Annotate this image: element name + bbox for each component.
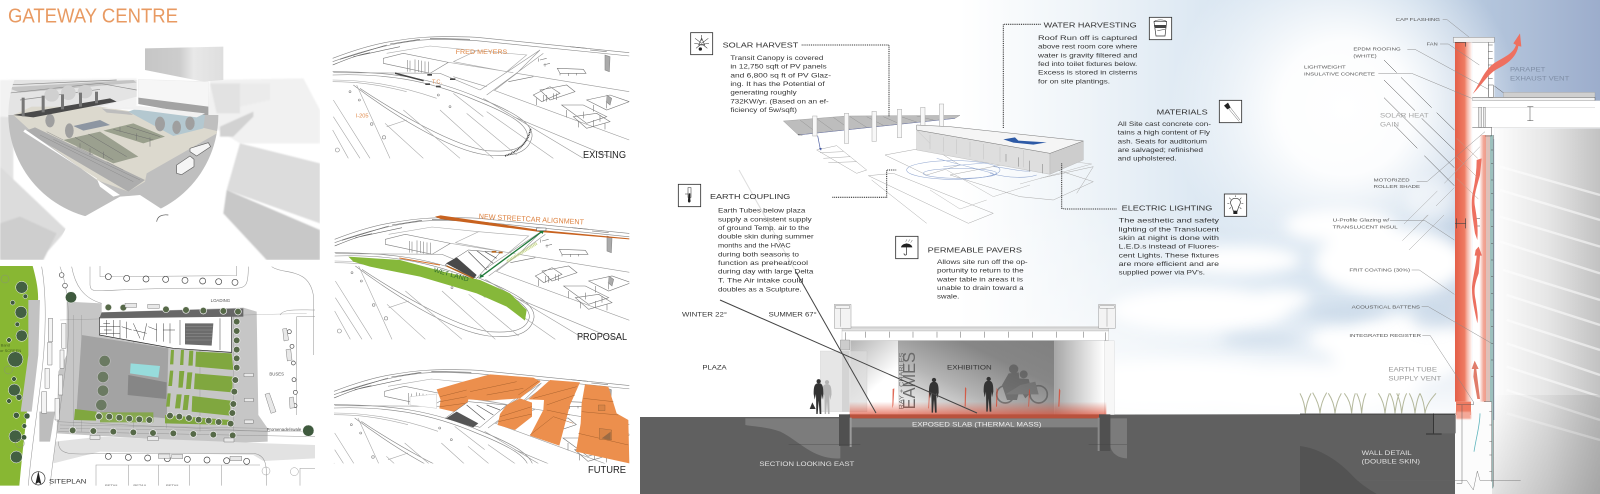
transit vehicles [42,318,66,420]
section looking east: RAY + CHARLES [900,353,906,409]
ground lines [1434,415,1456,433]
people silhouettes [822,380,832,414]
detail labels: FAN [1427,42,1438,48]
section labels: EXPOSED SLAB (THERMAL MASS) [912,422,1041,429]
clouds [1050,180,1470,415]
blurred surrounding massing [0,78,320,260]
heat plumes [892,387,1060,408]
site plan [0,266,315,488]
icon: light bulb [1224,194,1247,216]
callout: electric lighting: L.E.D.s instead of Fluores- [1119,245,1219,251]
caption: existing: EXISTING [583,149,626,161]
callout: electric lighting: ELECTRIC LIGHTING [1122,205,1213,213]
lower detail labels: INTEGRATED REGISTER [1349,333,1421,339]
electric dotted leader [1062,163,1117,209]
icon: trowel [1219,100,1242,123]
site plan: RETAIL [166,483,180,488]
greenway arrow [480,230,544,277]
lower detail labels: (DOUBLE SKIN) [1362,459,1420,466]
canopy [783,115,960,135]
site plan: RETAIL [133,483,148,488]
callout: electric lighting: supplied power via PV's. [1119,271,1205,277]
icon: thermometer [678,184,701,207]
lower detail labels: ACOUSTICAL BATTENS [1352,304,1421,310]
callout: water harvesting [1037,17,1172,85]
facade [917,130,1050,174]
cavity backing [1472,42,1494,139]
transit centre stops [395,72,455,87]
section labels: SECTION LOOKING EAST [759,461,855,468]
detail labels: (WHITE) [1353,53,1377,59]
callout: earth coupling: of ground Temp. air to the [718,226,810,232]
earth tube supply stream [1474,413,1480,452]
map: proposal: NEW STREETCAR ALIGNMENT [479,212,585,227]
map: existing [333,37,629,158]
callout: electric lighting: are more efficient and are [1119,262,1220,268]
detail labels: CAP FLASHING [1396,17,1440,23]
callout: electric lighting: skin at night is done with [1119,236,1219,242]
callout: electric lighting [1119,194,1247,277]
callout: water harvesting: water is gravity filtered and [1037,53,1137,59]
siteplan label: SITEPLAN [49,478,87,485]
Eames exhibit text: EAMES [899,352,919,409]
callout: solar harvest: in 12,750 sqft of PV panels [730,65,827,71]
section labels [682,311,1041,468]
cavity airflow arrows [1472,158,1482,240]
roof [917,125,1083,153]
detail labels: U-Profile Glazing w/ [1333,218,1390,224]
callout: water harvesting: fed into toilet fixtures below. [1038,62,1138,68]
light streaks [1500,167,1600,440]
ground disc [8,80,218,216]
plaza surface [13,107,220,192]
north arrow [32,471,45,485]
3D building diagram [783,45,1093,223]
callout: solar harvest: Transit Canopy is covered [730,56,823,62]
detail labels [1304,17,1569,230]
detail labels: LIGHTWEIGHT [1304,65,1346,71]
icon: solar [691,33,713,55]
callout: solar harvest: generating roughly [730,91,797,97]
callout: electric lighting: cent Lights. These fixtures [1119,253,1219,259]
trees [45,114,195,138]
site paving [57,302,268,443]
callout: earth coupling: EARTH COUPLING [710,193,791,201]
callout: materials: ash. Seats for auditorium [1118,139,1207,145]
sky background [960,0,1600,420]
inner cavity [1472,128,1481,494]
caption: future: FUTURE [588,464,626,476]
map: proposal [335,212,631,339]
callout: water harvesting: for on site plantings. [1038,79,1110,85]
lower detail labels: WALL DETAIL [1362,450,1412,457]
plaza slab [77,335,168,418]
callout: earth coupling: doubles as a Sculpture. [718,287,802,293]
lower detail labels: SUPPLY VENT [1388,375,1441,382]
section labels: WINTER 22° [682,311,728,318]
leader lines [1412,270,1492,402]
upper airflow arrow [1472,247,1482,323]
icon: umbrella [896,236,918,259]
trees [69,304,241,439]
callout: permeable pavers: swale. [937,295,960,301]
wetland [348,257,527,321]
detail labels: SOLAR HEAT [1380,113,1429,120]
callout: earth coupling: double skin during summer [718,235,814,241]
ground [640,414,1456,494]
detail labels: MOTORIZED [1374,177,1410,183]
detail labels: EXHAUST VENT [1510,76,1569,83]
station canopy [445,250,500,278]
site plan: BUSES [269,371,284,376]
map: future [334,369,630,464]
hall building [917,24,1117,209]
footings [839,414,1110,451]
callout: water harvesting: Roof Run off is captured [1038,36,1137,42]
station in future [445,402,507,427]
earth tube and sub-slab bands [745,418,840,458]
parapet and cavity [1453,37,1494,42]
detail labels: GAIN [1380,121,1399,128]
callout: materials: tains a high content of Fly [1118,131,1210,137]
section labels: EXHIBITION [947,364,992,371]
callout: materials: All Site cast concrete con- [1118,122,1211,128]
road lines [28,266,315,486]
earth bulge [1300,446,1377,494]
future development blocks [410,374,629,463]
map: existing: I-205 [356,114,369,120]
callout: water harvesting: above rest room core where [1038,45,1138,51]
callout: solar harvest: ing. It has the Potential of [730,82,825,88]
callout: electric lighting: lighting of the Translucent [1119,227,1219,233]
callout: earth coupling: during day with large Delta [718,270,814,276]
callout: solar harvest: and 6,800 sq ft of PV Glaz- [730,73,831,79]
interior gradient [1494,128,1600,494]
section looking east [640,170,1456,494]
lower detail labels [1349,268,1441,466]
lawn panels [63,132,138,163]
sun glare [1170,0,1520,283]
sun angle lines [720,170,977,413]
callout: earth coupling: function as preheat/cool [718,261,808,267]
callout: permeable pavers: unable to drain toward a [937,286,1025,292]
callout: earth coupling [678,184,814,293]
title: GATEWAY CENTRE [8,6,178,28]
streetcar alignment arrow [435,215,629,239]
skylight pool [1003,137,1047,145]
parked vehicles [90,303,295,461]
callout: permeable pavers: portunity to return to the [937,269,1025,275]
icon: bucket [1149,17,1172,40]
site plan: Band [1,343,10,348]
block voids [598,405,612,440]
roof [1472,101,1600,128]
callout: solar harvest: 732KW/yr. (Based on an ef- [730,99,829,105]
detail labels: EPDM ROOFING [1353,47,1401,53]
callout: earth coupling: Earth Tubes below plaza [718,208,806,214]
callout: permeable pavers: PERMEABLE PAVERS [928,246,1022,254]
water dotted leader [1003,24,1041,128]
interior back wall [850,341,898,415]
plan labels: LOADING [211,298,231,303]
earth dotted leader [832,170,897,197]
callout: water harvesting: WATER HARVESTING [1044,21,1137,29]
map: proposal: WET LAND [433,267,470,284]
motorcycle mural [997,364,1047,403]
solar dotted leader [802,45,889,117]
detail labels: PARAPET [1510,67,1545,74]
map labels: FRED MEYERS [456,50,507,56]
grass [1300,393,1436,413]
building plan [99,308,243,352]
detail labels: TRANSLUCENT INSUL [1333,224,1398,230]
roof assembly [834,304,1115,350]
lower detail labels: FRIT COATING (30%) [1349,268,1410,274]
detail labels: INSULATIVE CONCRETE [1304,72,1376,78]
exhaust airflow arrow [1473,33,1521,94]
caption: proposal: PROPOSAL [577,331,627,343]
callout: earth coupling: months and the HVAC [718,243,791,249]
wall detail upper [1304,17,1600,494]
red heat glow [850,402,1106,416]
callout: water harvesting: Excess is stored in cisterns [1038,71,1137,77]
aerial perspective render [0,47,320,260]
lawns [74,350,233,425]
lower airflow arrow [1472,361,1480,399]
buses [177,156,194,175]
leader lines [1378,19,1488,240]
site plan: or SCREEN [0,348,21,353]
outer red skin [1455,42,1472,494]
callout: earth coupling: supply a consistent supply [718,217,812,223]
site plan: RETAIL [105,483,119,488]
entry glass [820,351,867,412]
callout: solar harvest [691,33,831,114]
ground outlines [817,146,1093,223]
fountain [130,363,160,378]
map: existing: T.C. [432,79,442,85]
callout: materials: and upholstered. [1118,157,1177,163]
site outlines [930,158,1092,209]
wall detail lower [1300,247,1600,494]
callout: materials [1118,100,1242,163]
callout: permeable pavers [896,236,1028,301]
transit canopy [13,98,117,117]
callout: materials: MATERIALS [1157,108,1208,116]
callout: materials: are salvaged; refinished [1118,148,1203,154]
sidewalk pavers [25,127,145,192]
base of wall [1455,402,1492,494]
callout: earth coupling: T. The Air intake could [718,278,803,284]
callout: earth coupling: during both seasons to [718,252,800,258]
callout: electric lighting: The aesthetic and safety [1119,219,1219,225]
tower [145,47,223,82]
section labels: SUMMER 67° [769,311,817,318]
callout: solar harvest: SOLAR HARVEST [723,41,799,49]
glass hall [128,107,205,136]
solar rays [1384,60,1478,199]
detail labels: ROLLER SHADE [1374,184,1421,190]
section labels: PLAZA [702,364,728,371]
street paving [53,437,315,463]
callout: permeable pavers: Allows site run off the op- [937,260,1028,266]
callout: solar harvest: ficiency of 5w/sqft) [730,108,797,114]
site plan: Promenade/swale [267,427,302,432]
park strip [0,266,38,486]
grid overlay [60,312,307,432]
callout: permeable pavers: water table in areas it is [936,277,1023,283]
lower detail labels: EARTH TUBE [1388,367,1438,374]
